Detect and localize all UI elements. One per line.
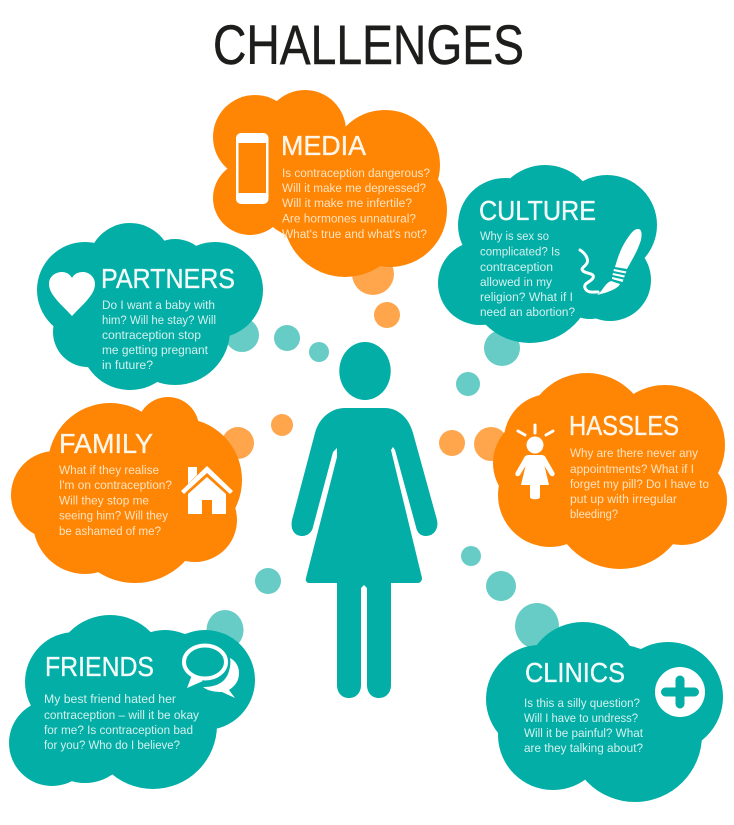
title: CHALLENGES [213, 13, 524, 76]
partners questions: Do I want a baby with [102, 298, 215, 312]
family questions: be ashamed of me? [59, 524, 161, 538]
media questions: Will it make me infertile? [282, 196, 412, 210]
media questions: What's true and what's not? [282, 227, 427, 241]
partners cloud [37, 223, 263, 390]
culture questions: contraception [480, 260, 553, 274]
family questions: I'm on contraception? [59, 478, 172, 492]
friends heading: FRIENDS [45, 651, 154, 682]
icon: medical plus [655, 667, 705, 717]
hassles questions: put up with irregular [570, 492, 677, 506]
hassles questions [570, 446, 709, 521]
panel: friends [9, 615, 255, 789]
icon: woman with alert rays [515, 425, 555, 499]
culture questions [480, 229, 575, 319]
family heading: FAMILY [59, 428, 153, 459]
family questions: seeing him? Will they [59, 508, 169, 522]
partners questions: me getting pregnant [102, 343, 209, 357]
media questions: Are hormones unnatural? [282, 212, 416, 226]
icon: house [181, 466, 233, 514]
family questions [59, 463, 172, 538]
friends cloud [9, 615, 255, 789]
friends questions: My best friend hated her [44, 692, 176, 706]
central woman figure [292, 342, 437, 698]
partners heading: PARTNERS [101, 263, 235, 294]
hassles questions: bleeding? [570, 507, 618, 521]
media questions [282, 166, 430, 241]
media heading: MEDIA [281, 130, 366, 161]
family questions: Will they stop me [59, 494, 149, 508]
friends questions: contraception – will it be okay [44, 708, 200, 722]
culture questions: Why is sex so [480, 229, 549, 243]
panel: clinics [486, 622, 723, 802]
thought dots: teal [206, 318, 559, 650]
icon: phone [236, 133, 268, 204]
culture questions: complicated? Is [480, 244, 560, 258]
partners questions: contraception stop [102, 328, 201, 342]
clinics heading: CLINICS [525, 657, 625, 688]
friends questions: for you? Who do I believe? [44, 738, 180, 752]
partners questions [102, 298, 216, 372]
clinics questions: Is this a silly question? [524, 696, 640, 710]
partners questions: him? Will he stay? Will [102, 313, 216, 327]
culture heading: CULTURE [479, 195, 596, 226]
media questions: Is contraception dangerous? [282, 166, 430, 180]
culture cloud [438, 165, 657, 343]
media questions: Will it make me depressed? [282, 181, 426, 195]
culture questions: religion? What if I [480, 290, 573, 304]
culture questions: need an abortion? [480, 305, 575, 319]
clinics questions: Will it be painful? What [524, 726, 644, 740]
icon: speech bubbles [184, 646, 239, 698]
panel: partners [37, 223, 263, 390]
family questions: What if they realise [59, 463, 159, 477]
friends questions [44, 692, 200, 752]
thought dots: orange [222, 253, 508, 461]
icon: paintbrush [580, 229, 642, 295]
family cloud [11, 397, 242, 583]
clinics questions [524, 696, 644, 755]
panel: family [11, 397, 242, 583]
partners questions: in future? [102, 358, 153, 372]
hassles questions: appointments? What if I [570, 462, 694, 476]
hassles heading: HASSLES [569, 410, 679, 441]
hassles questions: Why are there never any [570, 446, 699, 460]
icon: heart [49, 272, 95, 316]
media cloud [213, 90, 447, 277]
friends questions: for me? Is contraception bad [44, 723, 193, 737]
hassles cloud [493, 373, 727, 569]
panel: hassles [493, 373, 727, 569]
hassles questions: forget my pill? Do I have to [570, 477, 709, 491]
panel: culture [438, 165, 657, 343]
clinics cloud [486, 622, 723, 802]
culture questions: allowed in my [480, 275, 553, 289]
clinics questions: are they talking about? [524, 741, 643, 755]
clinics questions: Will I have to undress? [524, 711, 638, 725]
panel: media [213, 90, 447, 277]
